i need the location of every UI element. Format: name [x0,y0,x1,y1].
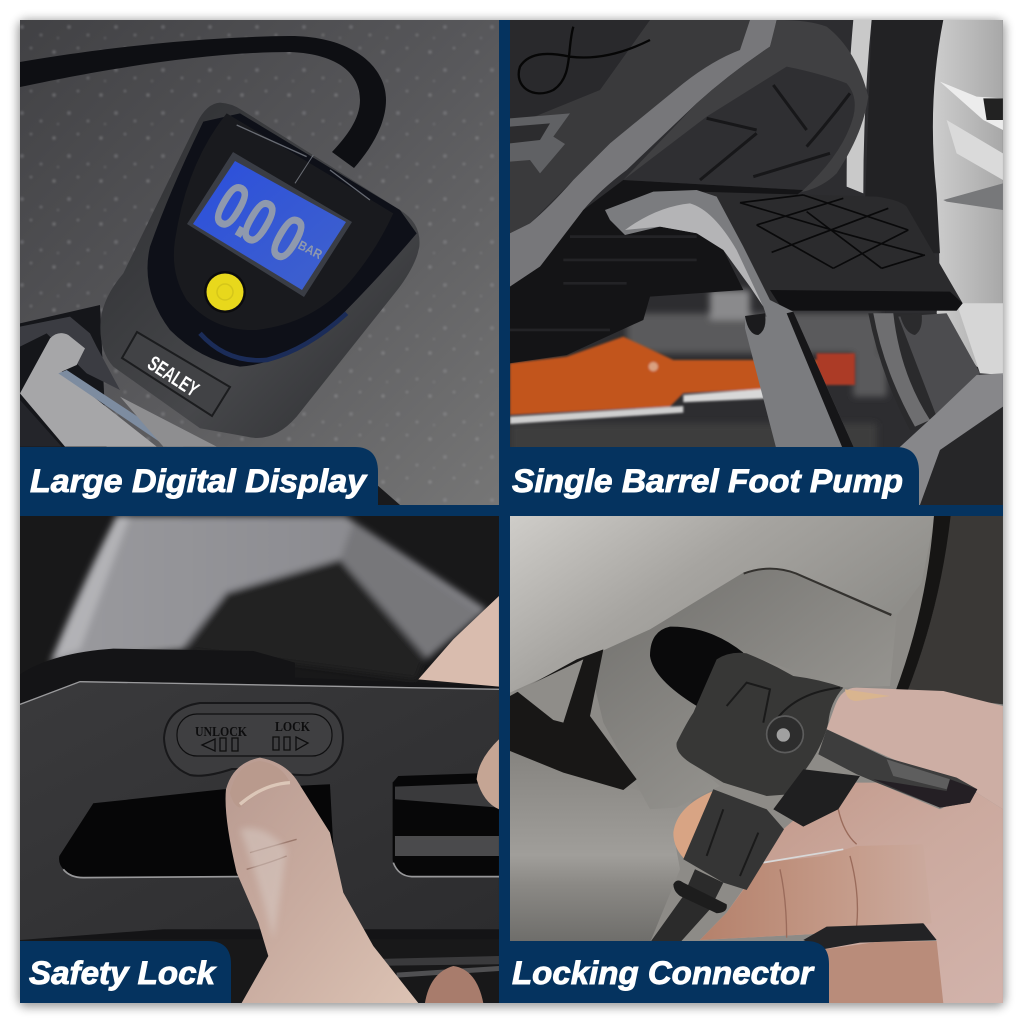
label: large digital display: Large Digital Display [30,463,368,499]
midsole [510,20,777,287]
lever [818,729,977,808]
dark gap [510,649,637,790]
hose tube [650,869,723,943]
power button [204,271,246,313]
outsole lower [510,180,803,363]
right slot [393,773,499,877]
horizontal divider [20,505,1003,516]
left slot [59,784,335,878]
lower silver [510,749,697,943]
digital gauge [100,103,420,438]
recessed spoke [587,566,897,809]
pump base [897,373,1003,505]
sole [623,67,855,190]
label: safety lock: Safety Lock [29,955,217,991]
tread pattern [740,195,925,268]
hand behind connector [673,783,1003,1003]
valve hole [650,627,743,706]
heel [623,20,868,192]
unit: BAR [296,237,325,262]
pedal arm [605,190,855,450]
label: single barrel foot pump [499,447,919,516]
brand badge [122,332,230,416]
lock switch [164,703,343,776]
label: large digital display [20,447,378,516]
lock label: LOCK [275,720,310,735]
label: locking connector [499,941,829,1003]
vertical divider [499,20,510,1003]
panel: safety lock [20,516,499,1003]
tyre [907,516,1003,704]
orange jack [510,337,855,424]
black plate [20,649,499,978]
connector stem [683,789,784,890]
under clamp [773,769,860,827]
index finger and lever [818,688,1003,809]
thumb on switch [226,758,418,1003]
other fingers [418,596,499,1003]
unlock label: UNLOCK [195,725,247,740]
gauge body [100,103,420,438]
pump frame [20,305,217,450]
LCD screen [187,152,352,297]
label: single barrel foot pump: Single Barrel Foot Pump [512,463,903,499]
wheel rim [929,20,1003,375]
panel: single barrel foot pump [510,20,1003,505]
wheel background [50,516,487,679]
panel: locking connector [510,516,1003,1003]
brand badge: SEALEY [143,352,203,402]
shoelaces [519,27,650,93]
palm and fingers [700,783,1003,1003]
shoe [510,20,868,363]
shoe upper [510,20,750,233]
tyre [863,20,943,253]
reading: 0.00 [201,168,318,278]
upper spoke [510,516,935,693]
connector [650,653,860,943]
blurred background [510,290,887,457]
label: locking connector: Locking Connector [512,955,815,991]
right arm [898,313,980,417]
dark band [803,923,937,949]
thumb tip [673,791,713,861]
air hose [20,36,386,168]
foot pedal [605,190,1003,505]
lower parts [384,956,499,966]
label: safety lock [20,941,231,1003]
panel: large digital display [20,20,499,505]
pedal rubber [697,192,963,311]
